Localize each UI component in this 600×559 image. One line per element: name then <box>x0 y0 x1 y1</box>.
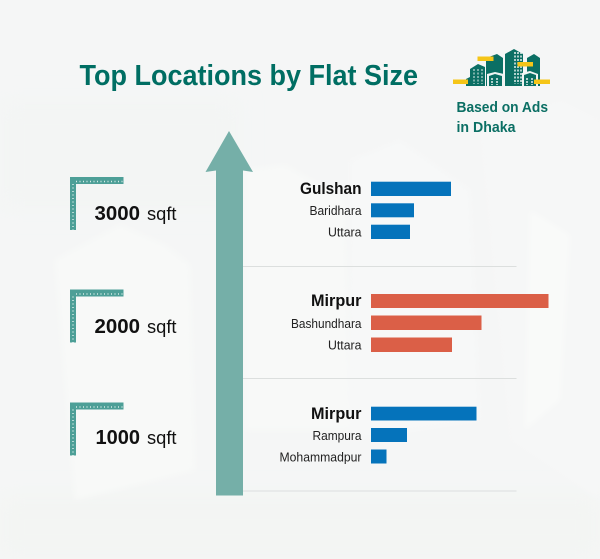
caption: based on ads: in Dhaka <box>456 120 516 136</box>
label: 3000 sqft <box>94 202 176 225</box>
bar chart: 1000 sqft group: Mirpur <box>311 404 362 423</box>
ruler: 3000 sqft <box>70 177 124 230</box>
bar chart: 3000 sqft group: Baridhara <box>310 204 362 218</box>
label: 1000 sqft: 1000 <box>96 426 140 449</box>
title: Top Locations by Flat Size <box>80 60 418 92</box>
icon: city buildings <box>453 49 550 87</box>
label: 2000 sqft: 2000 <box>94 315 140 338</box>
bar chart: 3000 sqft group: Uttara <box>328 226 362 240</box>
bar chart: 1000 sqft group <box>280 404 476 464</box>
label: 2000 sqft: sqft <box>147 317 176 337</box>
bar chart: 1000 sqft group: Rampura <box>312 429 362 443</box>
ruler: 2000 sqft <box>70 290 124 342</box>
label: 1000 sqft <box>96 426 176 449</box>
bar chart: 2000 sqft group <box>291 291 548 352</box>
bar chart: 2000 sqft group: Uttara <box>328 338 362 352</box>
divider lines <box>243 266 516 491</box>
ruler: 1000 sqft <box>70 402 124 456</box>
bar chart: 3000 sqft group <box>300 180 451 240</box>
bar chart: 1000 sqft group: Mohammadpur <box>280 450 362 464</box>
caption: based on ads <box>456 100 548 136</box>
arrow: rising flat size <box>206 131 253 496</box>
label: 1000 sqft: sqft <box>147 428 176 448</box>
label: 3000 sqft: sqft <box>147 204 176 224</box>
bar chart: 2000 sqft group: Bashundhara <box>291 317 362 331</box>
label: 2000 sqft <box>94 315 176 338</box>
bar chart: 2000 sqft group: Mirpur <box>311 291 362 310</box>
bar chart: 3000 sqft group: Gulshan <box>300 180 362 198</box>
label: 3000 sqft: 3000 <box>94 202 140 225</box>
caption: based on ads: Based on Ads <box>456 100 548 116</box>
